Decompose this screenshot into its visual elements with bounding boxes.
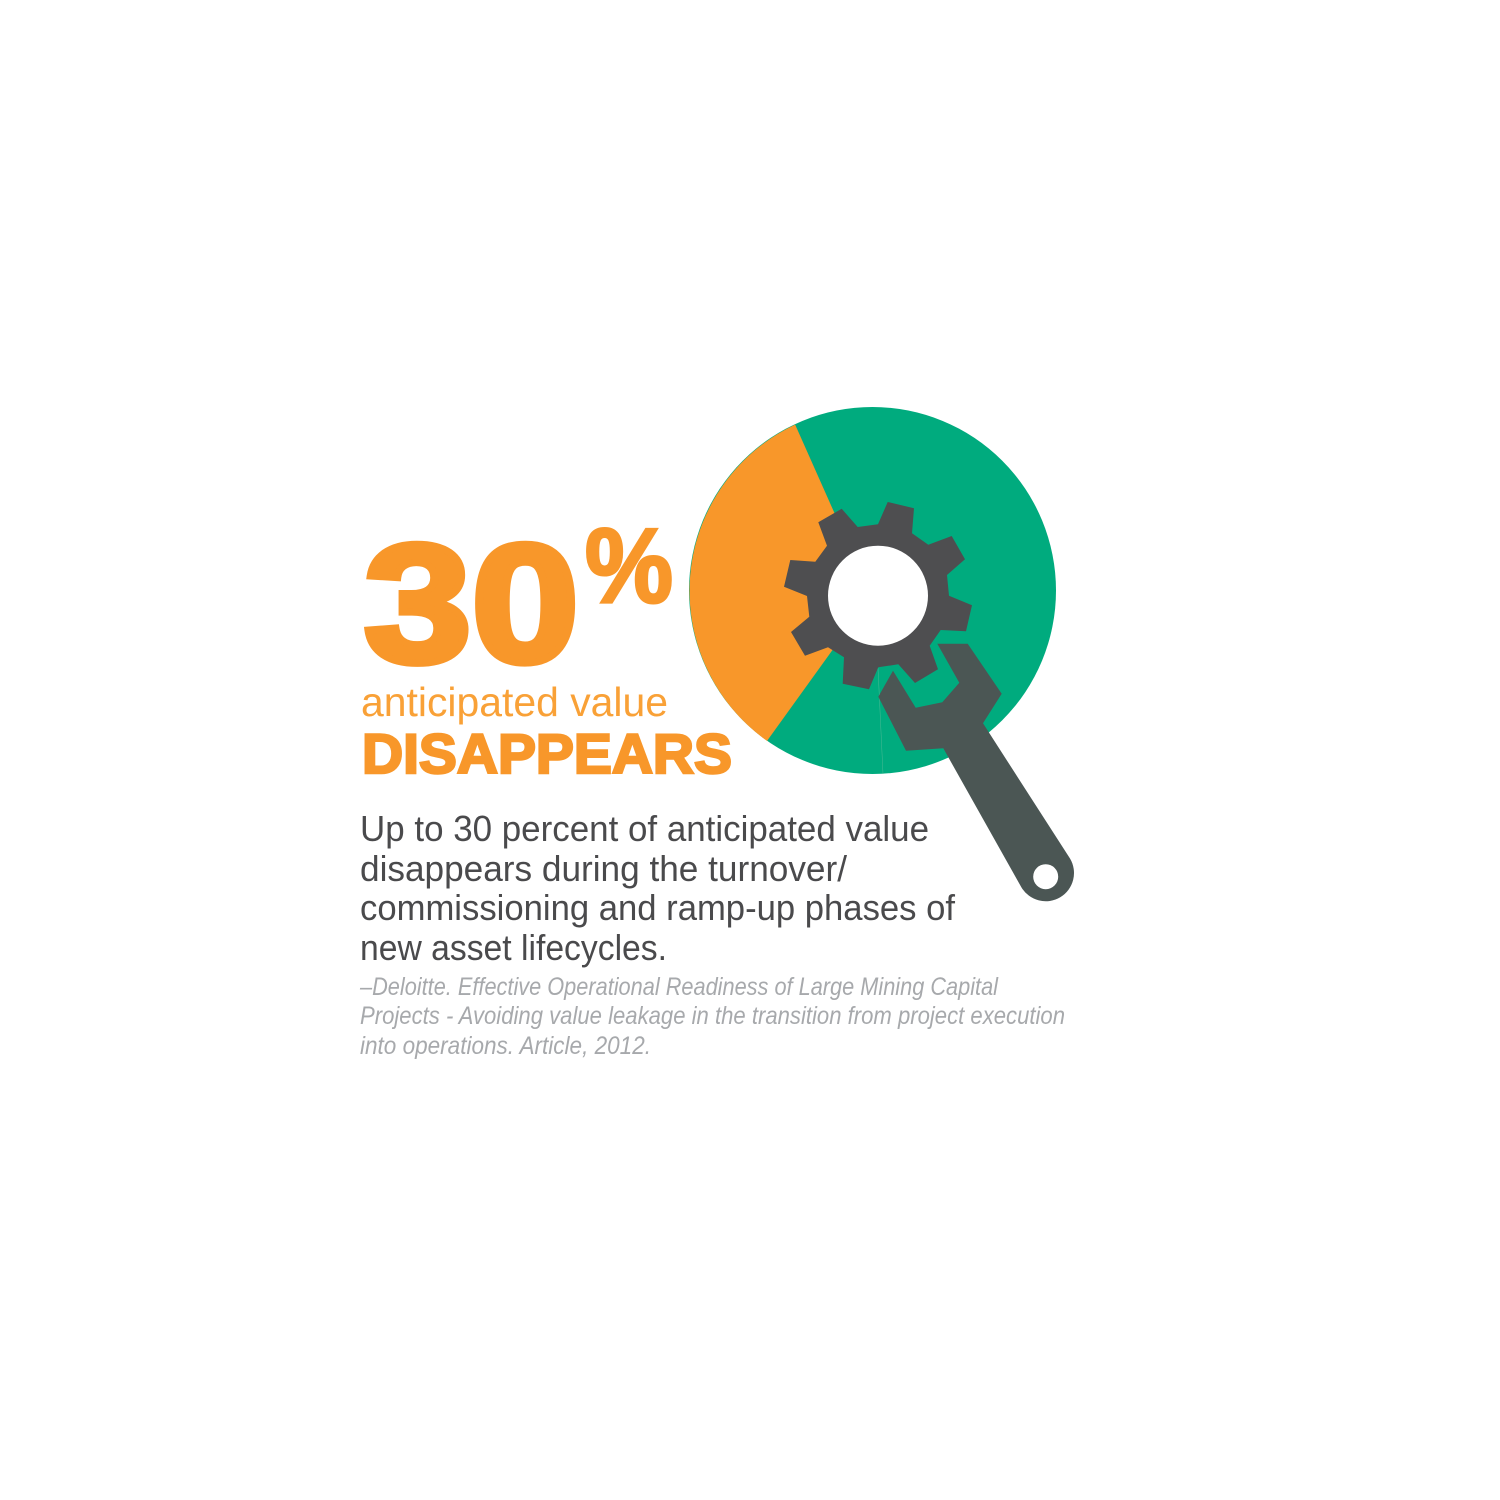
body text: disappears during the turnover/ [360,848,847,889]
icon: gear [784,502,972,689]
percent sign: % [585,507,673,625]
body text: commissioning and ramp-up phases of [360,887,956,928]
source citation [359,973,1065,1060]
body text: new asset lifecycles. [360,927,667,968]
body text: Up to 30 percent of anticipated value [360,808,929,849]
pie chart [689,407,1056,774]
source citation: into operations. Article, 2012. [360,1032,651,1060]
source citation: Projects - Avoiding value leakage in the transition from project execution [360,1002,1065,1030]
source citation: –Deloitte. Effective Operational Readiness of Large Mining Capital [359,973,999,1001]
icon: wrench [878,644,1074,901]
subheading: anticipated value: anticipated value [361,679,668,725]
headline: 30% [364,507,673,698]
body text [360,808,956,968]
orange pie wedge: 30 percent [690,425,871,740]
pie seam line [878,668,883,774]
headline: 30%: 30 [364,510,579,698]
subheading: disappears: DISAPPEARS [362,722,732,785]
